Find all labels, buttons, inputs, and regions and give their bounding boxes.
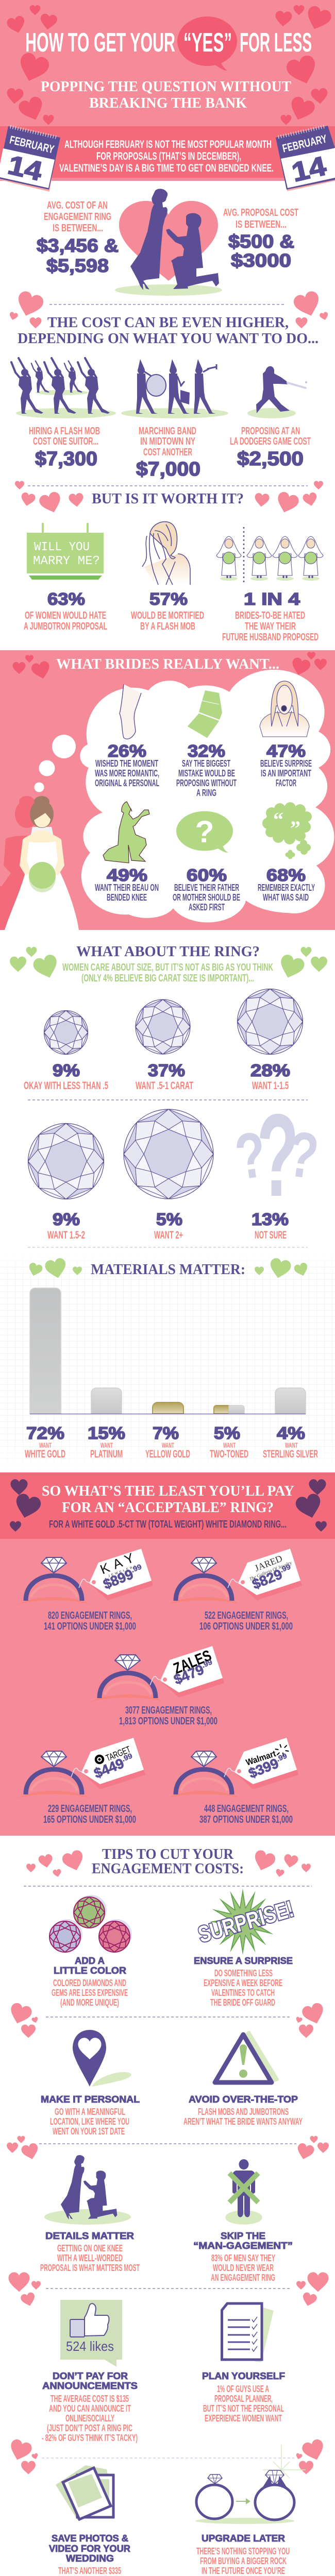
stat: white gold: WANT: [39, 1441, 52, 1449]
icon: kneeling man: [103, 802, 149, 863]
item: target: 165 OPTIONS UNDER $1,000: [43, 1814, 136, 1825]
icon: photos: [56, 2465, 113, 2520]
icon: map pin: [73, 2030, 131, 2087]
chart item: 2+ carat: 5%: [156, 1210, 182, 1229]
icon: hearts: [7, 2438, 327, 2475]
chart item: less than .5: OKAY WITH LESS THAN .5: [24, 1080, 108, 1092]
tip: man-gagement: “MAN-GAGEMENT”: [193, 2241, 293, 2251]
panel: ring prices: [0, 1539, 335, 1836]
title: “YES”: [183, 28, 232, 58]
stat: jumbotron: A JUMBOTRON PROPOSAL: [24, 621, 107, 632]
icon: warning triangle: [215, 2032, 277, 2082]
heading: WHAT ABOUT THE RING?: [76, 944, 260, 960]
item: zales: .99: [200, 1657, 213, 1669]
icon: jumbotron: [27, 523, 104, 580]
text: february intro: FOR PROPOSALS (THAT’S IN DECEMBER),: [96, 150, 241, 162]
tip: plan yourself: PROPOSAL PLANNER,: [214, 2394, 273, 2404]
tip: photos: THAT’S ANOTHER $335: [58, 2566, 121, 2576]
stat: 60%: ASKED FIRST: [189, 902, 225, 912]
heading: ENGAGEMENT COSTS:: [92, 1861, 244, 1877]
icon: quote cloud: [262, 802, 312, 859]
icon: quote cloud: “: [273, 808, 283, 831]
item: walmart: $399: [246, 1755, 281, 1782]
chart item: 1.5-2 carat: [28, 1123, 104, 1241]
tip: announcements: (JUST DON’T POST A RING PIC: [47, 2423, 132, 2433]
chart item: 2+ carat: [124, 1109, 213, 1241]
chart item: not sure: 13%: [252, 1210, 289, 1229]
tip: photos: WEDDING: [66, 2553, 114, 2564]
stat: 68%: [258, 866, 315, 903]
icon: like bubble: [60, 2300, 122, 2367]
icon: left calendar: [0, 126, 60, 192]
icon: right calendar: 14: [289, 151, 329, 188]
stat: 49%: BENDED KNEE: [107, 892, 147, 903]
text: ring cost: IS BETWEEN...: [53, 223, 103, 234]
text: marching band cost: MARCHING BAND: [139, 426, 196, 437]
stat: 32%: A RING: [196, 788, 216, 798]
text: flash mob cost: $7,300: [35, 448, 97, 470]
chart item: .5-1 carat: 37%: [148, 1061, 185, 1080]
stat: yellow gold: YELLOW GOLD: [145, 1448, 190, 1460]
item: kay: KAY: [98, 1548, 141, 1577]
tip: plan yourself: EXPERIENCE WOMEN WANT: [205, 2413, 282, 2424]
panel: what about the ring: [10, 944, 327, 1247]
stat: sterling silver: [263, 1423, 318, 1460]
icon: hearts: [15, 481, 323, 516]
chart item: not sure: ?: [283, 1118, 323, 1193]
panel: acceptable ring heading: [0, 1472, 335, 1539]
chart item: not sure: NOT SURE: [255, 1229, 287, 1241]
heading: SO WHAT’S THE LEAST YOU’LL PAY: [42, 1483, 294, 1499]
stat: 32%: PROPOSING WITHOUT: [176, 778, 237, 788]
item: kay: [16, 1548, 153, 1632]
panel: average costs: [37, 189, 298, 296]
stat: jumbotron: [24, 589, 107, 632]
tip: details: GETTING ON ONE KNEE: [57, 2243, 123, 2253]
icon: thought bubbles: [34, 735, 76, 792]
heading: [92, 1846, 244, 1877]
tip: plan yourself: 1% OF GUYS USE A: [217, 2384, 269, 2394]
chart item: not sure: ?: [231, 1118, 271, 1193]
item: zales: 1,813 OPTIONS UNDER $1,000: [119, 1716, 217, 1727]
icon: question bubble: ?: [195, 815, 214, 849]
icon: holding hands: [120, 684, 141, 739]
icon: header hearts: [6, 4, 333, 125]
icon: question bubble: [176, 811, 233, 853]
chart item: 1.5-2 carat: 9%: [53, 1210, 80, 1229]
tip: announcements: DON’T PAY FOR: [53, 2371, 128, 2381]
subtitle: BREAKING THE BANK: [89, 95, 247, 111]
tip: surprise: DO SOMETHING LESS: [214, 1968, 273, 1978]
text: dodgers cost: [230, 426, 311, 470]
text: ring cost: ENGAGEMENT RING: [44, 211, 111, 223]
heading: MATERIALS MATTER:: [91, 1262, 245, 1278]
icon: crossed-out man: [225, 2159, 262, 2225]
stat: 26%: 26%: [108, 741, 146, 760]
icon: right calendar: [276, 126, 335, 191]
text: marching band cost: [136, 426, 200, 480]
panel: is it worth it: [15, 481, 323, 643]
icon: proposal couple: [44, 2155, 131, 2225]
stat: two-toned: TWO-TONED: [210, 1448, 248, 1460]
stat: white gold: WHITE GOLD: [25, 1448, 65, 1460]
icon: brides: [216, 527, 323, 585]
stat: platinum: WANT: [100, 1441, 113, 1449]
tip: over-the-top: [183, 2032, 303, 2127]
item: kay: .99: [130, 1562, 143, 1574]
tip: color: GEMS ARE LESS EXPENSIVE: [52, 1988, 128, 1998]
tip: details: DETAILS MATTER: [45, 2231, 134, 2241]
icon: hearts: [8, 2272, 329, 2308]
item: jared: $829: [250, 1566, 284, 1592]
tip: personal: LOCATION, LIKE WHERE YOU: [50, 2116, 129, 2127]
panel: what brides really want: [0, 650, 335, 930]
tip: color: LITTLE COLOR: [54, 1965, 126, 1976]
tip: upgrade: [192, 2445, 306, 2576]
panel: february band: [0, 126, 335, 192]
stat: white gold: 72%: [26, 1423, 64, 1443]
stat: 26%: WAS MORE ROMANTIC,: [95, 768, 159, 778]
item: target: $449: [92, 1755, 126, 1782]
item: walmart: .99: [275, 1751, 288, 1763]
stat: flash mob: 57%: [149, 589, 188, 608]
icon: hearts: [12, 652, 327, 681]
tip: details: WITH A WELL-WORDED: [57, 2253, 123, 2263]
tip: over-the-top: AVOID OVER-THE-TOP: [189, 2094, 298, 2105]
icon: left calendar: 14: [5, 150, 45, 187]
heading: BUT IS IT WORTH IT?: [92, 491, 244, 507]
stat: 60%: BELIEVE THEIR FATHER: [174, 883, 239, 893]
text: flash mob cost: HIRING A FLASH MOB: [29, 426, 100, 437]
stat: flash mob: [131, 589, 204, 632]
icon: proposal couple on heart: [115, 189, 222, 296]
stat: two-toned: [210, 1423, 248, 1460]
stat: brides-to-be: THE WAY THEIR: [245, 621, 296, 632]
heading: THE COST CAN BE EVEN HIGHER,: [47, 315, 289, 331]
tip: color: COLORED DIAMONDS AND: [53, 1978, 126, 1988]
stat: flash mob: BY A FLASH MOB: [140, 621, 195, 632]
stat: flash mob: WOULD BE MORTIFIED: [131, 610, 204, 621]
stat: 32%: SAY THE BIGGEST: [182, 758, 230, 769]
text: february intro: [59, 139, 274, 174]
item: kay: JEWELERS: [108, 1565, 138, 1578]
icon: colored gems: [49, 1895, 132, 1952]
chart item: less than .5: 9%: [53, 1061, 80, 1080]
tip: man-gagement: [193, 2159, 293, 2283]
tip: surprise: VALENTINES TO CATCH: [211, 1988, 275, 1998]
tip: announcements: ONLINE/SOCIALLY: [65, 2413, 114, 2424]
panel: materials matter: [0, 1253, 335, 1472]
icon: bride: [0, 796, 79, 930]
title: HOW TO GET YOUR: [25, 28, 175, 58]
chart item: less than .5: [24, 1011, 108, 1092]
subtitle: [41, 79, 291, 111]
icon: dark hearts: [10, 1479, 327, 1532]
tip: announcements: [42, 2300, 138, 2443]
item: zales: 3077 ENGAGEMENT RINGS,: [125, 1705, 212, 1716]
stat: 47%: FACTOR: [276, 778, 296, 788]
item: zales: $479: [172, 1662, 206, 1688]
stat: 47%: 47%: [266, 741, 306, 760]
icon: flash mob: [11, 358, 116, 418]
item: target: 229 ENGAGEMENT RINGS,: [48, 1803, 132, 1815]
tip: personal: WENT ON YOUR 1ST DATE: [53, 2126, 125, 2137]
tip: surprise: EXPENSIVE A WEEK BEFORE: [204, 1978, 282, 1988]
icon: hearts: [7, 2136, 329, 2161]
icon: hearts: [7, 2002, 327, 2038]
stat: 60%: [173, 866, 240, 912]
panel: tips: [7, 1846, 329, 2576]
heading: DEPENDING ON WHAT YOU WANT TO DO...: [18, 331, 319, 347]
stat: 32%: MISTAKE WOULD BE: [178, 768, 235, 778]
item: target: [16, 1738, 145, 1825]
chart item: 2+ carat: WANT 2+: [154, 1229, 183, 1241]
chart item: .5-1 carat: [136, 999, 193, 1092]
item: zales: [90, 1646, 224, 1727]
bar chart: [30, 1288, 306, 1414]
stat: 49%: 49%: [107, 866, 147, 885]
item: walmart: [166, 1738, 298, 1825]
tip: personal: GO WITH A MEANINGFUL: [55, 2107, 125, 2117]
tip: plan yourself: [202, 2303, 285, 2424]
stat: 32%: 32%: [188, 741, 225, 760]
item: kay: 820 ENGAGEMENT RINGS,: [48, 1610, 132, 1621]
tip: color: (AND MORE UNIQUE): [60, 1997, 119, 2008]
heading: TIPS TO CUT YOUR: [102, 1846, 234, 1862]
tip: announcements: - 82% OF GUYS THINK IT’S TACKY): [42, 2433, 138, 2443]
text: ring cost: $3,456 &: [37, 235, 119, 256]
tip: personal: MAKE IT PERSONAL: [41, 2094, 140, 2105]
item: target: .99: [121, 1751, 133, 1763]
icon: like bubble: 524 likes: [66, 2338, 114, 2354]
icon: upgrade rings: [195, 2445, 306, 2524]
stat: 26%: ORIGINAL & PERSONAL: [95, 778, 159, 788]
tip: man-gagement: WOULD NEVER WEAR: [213, 2263, 274, 2273]
text: proposal cost: IS BETWEEN...: [236, 219, 287, 230]
tip: details: [40, 2155, 140, 2273]
chart item: not sure: [231, 1090, 323, 1241]
tip: details: PROPOSAL IS WHAT MATTERS MOST: [40, 2263, 140, 2273]
text: proposal cost: [223, 207, 298, 271]
chart item: 1-1.5 carat: WANT 1-1.5: [252, 1080, 289, 1092]
stat: brides-to-be: [222, 589, 319, 643]
icon: left calendar: FEBRUARY: [8, 133, 56, 156]
tip: man-gagement: AN ENGAGEMENT RING: [211, 2273, 275, 2283]
icon: green hearts: [10, 947, 327, 981]
icon: marching band: [121, 359, 228, 418]
item: jared: .99: [279, 1562, 292, 1574]
text: proposal cost: $3000: [231, 250, 291, 271]
icon: surprise burst: SURPRISE!: [195, 1896, 296, 1947]
stat: 26%: WISHED THE MOMENT: [95, 758, 158, 769]
text: ring cost: [37, 200, 119, 276]
text: ring cost: AVG. COST OF AN: [47, 200, 108, 211]
item: jared: The Galleria Of Jewelry: [248, 1560, 292, 1582]
item: zales: ZALES: [171, 1647, 214, 1677]
item: target: TARGET: [104, 1744, 132, 1764]
tip: photos: [44, 2465, 136, 2576]
text: dodgers cost: PROPOSING AT AN: [241, 426, 300, 437]
icon: checklist: [222, 2303, 274, 2362]
text: marching band cost: IN MIDTOWN NY: [140, 436, 195, 447]
chart item: 1.5-2 carat: WANT 1.5-2: [47, 1229, 85, 1241]
stat: platinum: [88, 1423, 125, 1460]
tip: man-gagement: 83% OF MEN SAY THEY: [211, 2253, 275, 2263]
icon: surprised woman: [260, 681, 309, 737]
item: kay: $899: [101, 1566, 136, 1592]
stat: 47%: [260, 741, 312, 788]
icon: speech bubble: [177, 16, 237, 71]
tip: announcements: THE AVERAGE COST IS $135: [51, 2394, 129, 2404]
tip: surprise: ENSURE A SURPRISE: [194, 1956, 293, 1966]
header panel: [0, 0, 335, 126]
icon: quote cloud: ”: [290, 817, 300, 840]
tip: personal: [41, 2030, 140, 2137]
stat: 68%: 68%: [266, 866, 306, 885]
heading: [42, 1483, 294, 1516]
tip: plan yourself: PLAN YOURSELF: [202, 2371, 285, 2381]
tip: surprise: [194, 1889, 296, 2008]
tip: photos: SAVE PHOTOS &: [52, 2533, 128, 2544]
stat: 32%: [176, 741, 237, 798]
item: jared: 522 ENGAGEMENT RINGS,: [205, 1610, 288, 1621]
item: jared: [166, 1549, 302, 1632]
icon: hearts: [8, 290, 329, 328]
icon: hearts: [26, 1849, 311, 1877]
stat: 49%: [95, 866, 159, 903]
stat: 60%: OR MOTHER SHOULD BE: [173, 892, 240, 903]
text: proposal cost: $500 &: [228, 231, 294, 252]
subtitle: POPPING THE QUESTION WITHOUT: [41, 79, 291, 95]
stat: yellow gold: 7%: [153, 1423, 179, 1443]
tip: photos: VIDEO FOR YOUR: [49, 2544, 130, 2554]
item: walmart: 448 ENGAGEMENT RINGS,: [204, 1803, 289, 1815]
stat: 60%: 60%: [187, 866, 227, 885]
icon: mortified woman: [142, 522, 190, 585]
stat: two-toned: WANT: [223, 1441, 236, 1449]
panel: thought cloud: [80, 670, 334, 922]
tip: surprise: THE BRIDE OFF GUARD: [210, 1997, 275, 2008]
icon: ring box: [187, 690, 222, 738]
panel: higher costs: [8, 290, 329, 480]
heading: FOR AN “ACCEPTABLE” RING?: [62, 1500, 274, 1516]
item: kay: 141 OPTIONS UNDER $1,000: [44, 1621, 136, 1632]
stat: yellow gold: [145, 1423, 190, 1460]
item: jared: JARED: [253, 1553, 284, 1573]
stat: platinum: 15%: [88, 1423, 125, 1443]
stat: jumbotron: OF WOMEN WOULD HATE: [25, 610, 106, 621]
icon: jumbotron: MARRY ME?: [33, 554, 100, 568]
chart item: not sure: ?: [257, 1090, 299, 1221]
text: dodgers cost: $2,500: [237, 448, 304, 470]
stat: jumbotron: 63%: [47, 589, 85, 608]
chart item: .5-1 carat: WANT .5-1 CARAT: [136, 1080, 193, 1092]
text: marching band cost: COST ANOTHER: [143, 447, 192, 458]
stat: white gold: [25, 1423, 65, 1460]
icon: green hearts: [27, 1257, 310, 1280]
chart item: 1-1.5 carat: 28%: [250, 1061, 290, 1080]
tip: announcements: ANNOUNCEMENTS: [42, 2381, 138, 2391]
stat: sterling silver: 4%: [277, 1423, 305, 1443]
tip: man-gagement: SKIP THE: [221, 2231, 265, 2241]
text: ring cost: $5,598: [46, 255, 109, 276]
heading: [18, 315, 319, 347]
tip: announcements: AND YOU CAN ANNOUNCE IT: [49, 2403, 131, 2414]
icon: jumbotron: WILL YOU: [34, 540, 90, 554]
stat: 49%: WANT THEIR BEAU ON: [95, 883, 159, 893]
stat: 26%: [95, 741, 159, 788]
text: marching band cost: $7,000: [136, 459, 200, 480]
stat: sterling silver: WANT: [285, 1441, 298, 1449]
icon: baseball batter: [247, 366, 307, 418]
tip: color: [49, 1895, 132, 2008]
tip: color: ADD A: [75, 1956, 105, 1966]
item: walmart: Walmart: [245, 1749, 277, 1768]
text: flash mob cost: [29, 426, 100, 470]
chart item: 1-1.5 carat: [237, 989, 303, 1092]
tip: upgrade: UPGRADE LATER: [202, 2533, 285, 2544]
text: subheading: [62, 962, 273, 984]
text: flash mob cost: COST ONE SUITOR...: [33, 436, 98, 447]
stat: yellow gold: WANT: [162, 1441, 174, 1449]
stat: platinum: PLATINUM: [90, 1448, 123, 1460]
stat: brides-to-be: 1 IN 4: [244, 589, 300, 608]
stat: two-toned: 5%: [214, 1423, 240, 1443]
heading: WHAT BRIDES REALLY WANT...: [56, 656, 279, 672]
